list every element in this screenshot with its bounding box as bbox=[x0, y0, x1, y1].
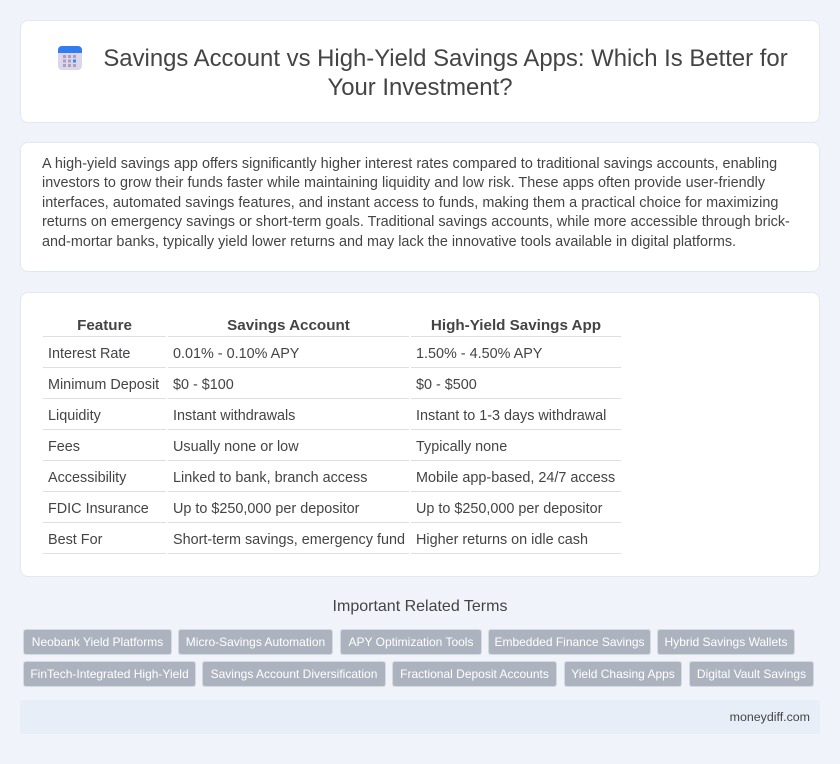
text block: summary: and-mortar banks, typically yield lower returns and may lack the innovative tools available in digital platforms. bbox=[42, 234, 736, 250]
comparison table: High-Yield Savings App bbox=[431, 317, 601, 334]
comparison table: Linked to bank, branch access bbox=[173, 470, 367, 486]
icon: calendar bbox=[58, 46, 82, 70]
comparison table: Mobile app-based, 24/7 access bbox=[416, 470, 615, 486]
text block: summary: returns on emergency savings or short-term goals. Traditional savings accounts, while more accessible through brick- bbox=[42, 214, 790, 230]
related terms tags bbox=[23, 629, 814, 687]
related terms tags: Yield Chasing Apps bbox=[571, 667, 675, 681]
related terms tags: Savings Account Diversification bbox=[211, 667, 377, 681]
related terms tags: Digital Vault Savings bbox=[697, 667, 806, 681]
panel: header bbox=[20, 20, 820, 123]
comparison table bbox=[43, 317, 621, 554]
comparison table: Usually none or low bbox=[173, 439, 299, 455]
comparison table: Up to $250,000 per depositor bbox=[173, 501, 359, 517]
comparison table: Instant to 1-3 days withdrawal bbox=[416, 408, 606, 424]
comparison table: Typically none bbox=[416, 439, 507, 455]
comparison table: Fees bbox=[48, 439, 80, 455]
comparison table: Interest Rate bbox=[48, 346, 130, 362]
related terms tags: FinTech-Integrated High-Yield bbox=[30, 667, 189, 681]
comparison table: 0.01% - 0.10% APY bbox=[173, 346, 299, 362]
comparison table: $0 - $100 bbox=[173, 377, 234, 393]
comparison table: Liquidity bbox=[48, 408, 101, 424]
comparison table: Short-term savings, emergency fund bbox=[173, 532, 405, 548]
related terms tags: Hybrid Savings Wallets bbox=[665, 635, 787, 649]
comparison table: Minimum Deposit bbox=[48, 377, 159, 393]
related terms tags: Neobank Yield Platforms bbox=[32, 635, 163, 649]
title: Your Investment? bbox=[327, 74, 513, 101]
related terms tags: Fractional Deposit Accounts bbox=[400, 667, 549, 681]
heading: related terms: Important Related Terms bbox=[333, 598, 507, 615]
text block: summary bbox=[42, 156, 790, 250]
comparison table: $0 - $500 bbox=[416, 377, 477, 393]
comparison table: Savings Account bbox=[227, 317, 350, 334]
comparison table: 1.50% - 4.50% APY bbox=[416, 346, 542, 362]
title bbox=[103, 45, 788, 101]
title: Savings Account vs High-Yield Savings Apps: Which Is Better for bbox=[103, 45, 788, 72]
comparison table: Best For bbox=[48, 532, 102, 548]
footer credit: moneydiff.com bbox=[730, 710, 810, 724]
comparison table: FDIC Insurance bbox=[48, 501, 149, 517]
panel: summary text bbox=[20, 142, 820, 272]
text block: summary: interfaces, automated savings features, and instant access to funds, making them a practical choice for maximizing bbox=[42, 195, 778, 211]
related terms tags: APY Optimization Tools bbox=[349, 635, 473, 649]
text block: summary: investors to grow their funds faster while maintaining liquidity and low risk. These apps often provide user-friendly bbox=[42, 175, 765, 191]
comparison table: Up to $250,000 per depositor bbox=[416, 501, 602, 517]
comparison table: Accessibility bbox=[48, 470, 126, 486]
comparison table: Feature bbox=[77, 317, 132, 334]
footer bbox=[20, 700, 820, 734]
panel: comparison table bbox=[20, 292, 820, 577]
comparison table: Higher returns on idle cash bbox=[416, 532, 588, 548]
related terms tags: Micro-Savings Automation bbox=[186, 635, 325, 649]
text block: summary: A high-yield savings app offers significantly higher interest rates compared to traditional savings accounts, enabling bbox=[42, 156, 777, 172]
related terms tags: Embedded Finance Savings bbox=[494, 635, 645, 649]
comparison table: Instant withdrawals bbox=[173, 408, 295, 424]
